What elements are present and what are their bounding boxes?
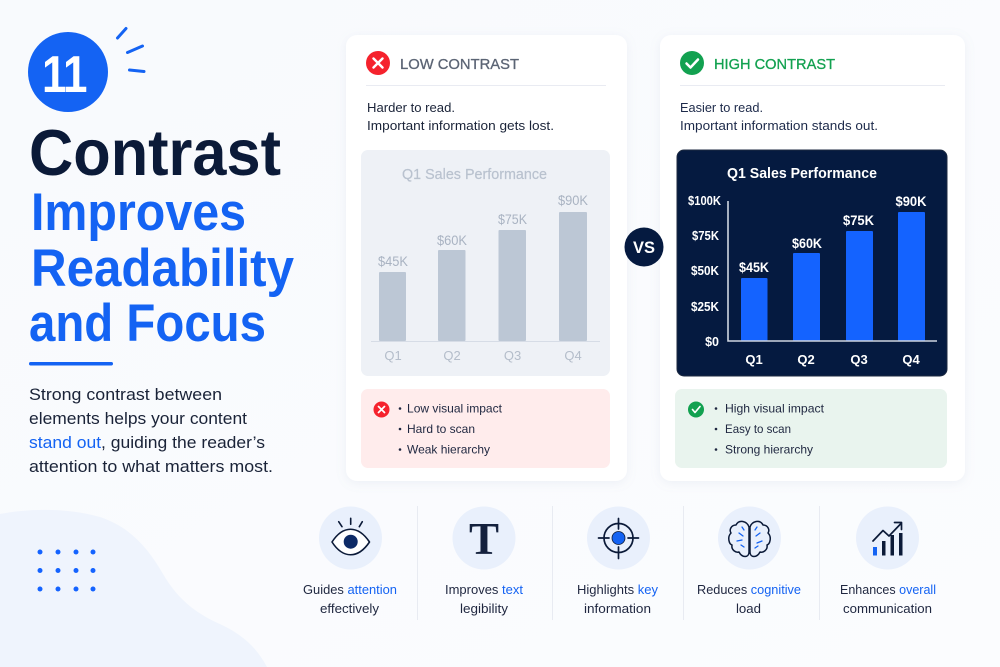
title [29, 116, 294, 353]
benefit: cognitive load: Reduces cognitive [697, 583, 801, 597]
bar chart: high contrast: $0 [705, 335, 719, 349]
description: high contrast [680, 100, 878, 133]
benefit: attention [303, 506, 397, 616]
bar chart: low contrast: Q2 [443, 348, 461, 363]
benefit: attention: Guides attention [303, 583, 397, 597]
title: Improves [31, 183, 246, 242]
icon: red cross [366, 51, 390, 75]
benefit: communication: Enhances overall [840, 583, 936, 597]
bar chart: high contrast: $100K [688, 194, 721, 208]
number badge [28, 32, 108, 112]
callout: high contrast points: Strong hierarchy [725, 442, 813, 456]
callout: low contrast points: Low visual impact [407, 402, 503, 416]
bar chart: low contrast: $90K [558, 193, 588, 208]
bar chart: low contrast [361, 150, 610, 376]
icon: green check [680, 51, 704, 75]
callout: low contrast points: Weak hierarchy [407, 442, 490, 456]
callout: high contrast points: High visual impact [725, 402, 825, 416]
description text: elements helps your content [29, 409, 247, 428]
dot grid [38, 550, 96, 592]
bar chart: low contrast: $60K [437, 233, 467, 248]
bar chart: low contrast: $75K [498, 212, 527, 227]
bar chart: high contrast: $25K [691, 300, 719, 314]
callout: high contrast points [675, 389, 947, 468]
title: and Focus [29, 294, 266, 353]
bar chart: low contrast: Q1 Sales Performance [402, 167, 547, 183]
panel: high contrast [660, 35, 965, 481]
benefit: communication [840, 506, 936, 616]
description: low contrast [367, 100, 554, 133]
description text: Strong contrast between [29, 385, 222, 404]
benefit: attention: effectively [320, 602, 380, 616]
bar chart: high contrast: $75K [692, 229, 719, 243]
bar chart: low contrast: Q3 [504, 348, 521, 363]
bar chart: low contrast: Q1 [384, 348, 402, 363]
title: Contrast [29, 116, 281, 189]
benefit: legibility: Improves text [445, 583, 524, 597]
heading: low contrast: LOW CONTRAST [400, 56, 519, 73]
bar chart: high contrast: $90K [896, 194, 927, 209]
description: low contrast: Important information gets lost. [367, 118, 554, 133]
benefit: legibility: legibility [460, 602, 509, 616]
title: Readability [31, 239, 294, 298]
callout: high contrast points: Easy to scan [725, 422, 791, 436]
description: high contrast: Important information stands out. [680, 118, 878, 133]
benefit: communication: communication [843, 602, 932, 616]
icon: letter T: T [469, 514, 499, 564]
bar chart: high contrast: Q3 [850, 352, 868, 367]
vs badge [624, 228, 664, 266]
bar chart: high contrast: Q1 Sales Performance [727, 165, 877, 182]
title underline [29, 362, 113, 366]
heading: high contrast: HIGH CONTRAST [714, 56, 835, 73]
vs badge: VS [633, 238, 655, 257]
bar chart: high contrast [677, 150, 947, 376]
bar chart: high contrast: $75K [843, 213, 874, 228]
benefit: key information: information [584, 602, 651, 616]
icon: target [598, 518, 638, 558]
panel: low contrast [346, 35, 627, 481]
description text: stand out, guiding the reader’s [29, 433, 265, 452]
bar chart: low contrast: Q4 [564, 348, 582, 363]
bar chart: high contrast: Q4 [902, 352, 920, 367]
bar chart: high contrast: $50K [691, 264, 719, 278]
bar chart: high contrast: Q1 [745, 352, 763, 367]
icon: brain [729, 521, 770, 556]
description text [29, 385, 273, 476]
callout: low contrast points: Hard to scan [407, 422, 475, 436]
description: high contrast: Easier to read. [680, 100, 763, 115]
description text: attention to what matters most. [29, 457, 273, 476]
bar chart: high contrast: $45K [739, 260, 769, 275]
decorative blob [0, 510, 267, 667]
benefit: cognitive load: load [736, 602, 761, 616]
spark lines [118, 28, 144, 72]
icon: eye [332, 518, 370, 555]
callout: low contrast points [361, 389, 610, 468]
bar chart: low contrast: $45K [378, 254, 408, 269]
description: low contrast: Harder to read. [367, 100, 455, 115]
icon: growth chart [873, 522, 902, 556]
benefit: legibility [445, 506, 524, 616]
benefit: key information [577, 506, 659, 616]
bar chart: high contrast: $60K [792, 236, 822, 251]
benefit: key information: Highlights key [577, 583, 659, 597]
benefit: cognitive load [697, 506, 801, 616]
number badge: 11 [42, 47, 87, 104]
bar chart: high contrast: Q2 [797, 352, 815, 367]
